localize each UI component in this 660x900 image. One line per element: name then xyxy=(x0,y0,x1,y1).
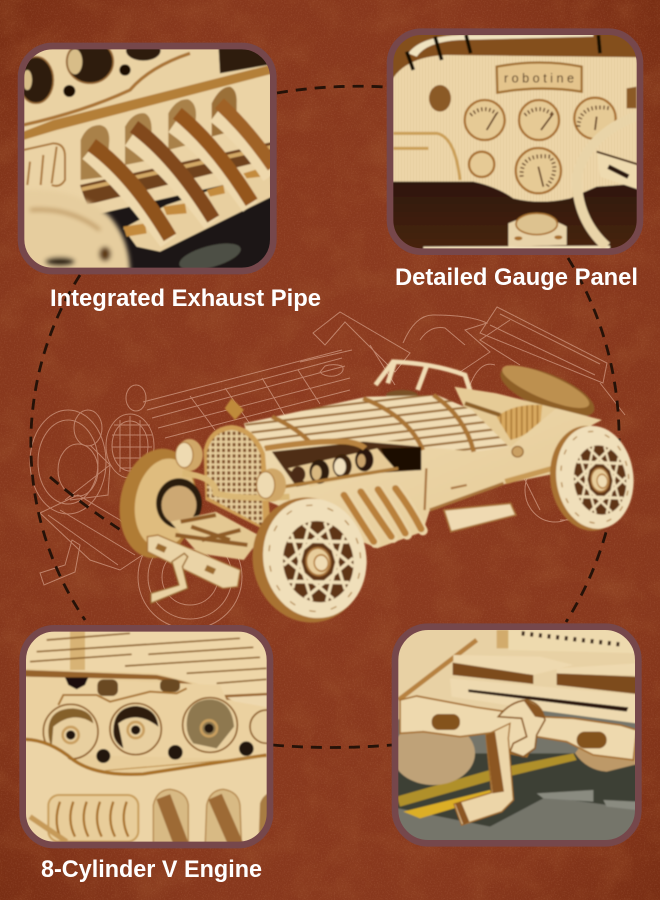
radiator grille xyxy=(182,398,289,528)
panel: gauge panel closeup xyxy=(387,30,643,257)
front chassis and crank xyxy=(147,512,261,603)
far front wheel xyxy=(112,444,203,563)
panel: hand crank closeup xyxy=(390,623,643,847)
photo: dashboard gauges: robotine xyxy=(504,71,574,85)
photo: crank and chassis xyxy=(398,630,635,840)
rear wheel xyxy=(545,422,639,535)
engine bay with cylinders xyxy=(265,441,421,487)
dashed connector arcs and links xyxy=(31,86,619,748)
panel: V engine closeup xyxy=(20,625,283,852)
panel border xyxy=(390,32,640,252)
photo: engine cylinders xyxy=(26,632,267,842)
body underlay and side xyxy=(244,395,602,548)
photo: exhaust pipes xyxy=(24,49,270,268)
blueprint ghost car outline xyxy=(30,307,625,629)
far rear wheel xyxy=(493,356,601,427)
exhaust pipes xyxy=(344,488,423,543)
wooden car model xyxy=(112,356,639,629)
headlights xyxy=(175,439,286,502)
panel border xyxy=(21,46,273,271)
panel border xyxy=(395,627,638,843)
heading: 8-Cylinder V Engine: 8-Cylinder V Engine xyxy=(41,856,262,883)
panel border xyxy=(23,628,270,845)
cockpit and seat xyxy=(386,387,602,450)
panel: integrated exhaust pipe closeup xyxy=(19,40,277,275)
heading: Integrated Exhaust Pipe: Integrated Exhaust Pipe xyxy=(50,285,321,312)
hood louvers xyxy=(244,395,509,452)
heading: Detailed Gauge Panel: Detailed Gauge Panel xyxy=(395,264,638,291)
windshield frame xyxy=(375,362,475,405)
front wheel xyxy=(244,491,375,629)
photo: dashboard gauges xyxy=(393,35,637,248)
